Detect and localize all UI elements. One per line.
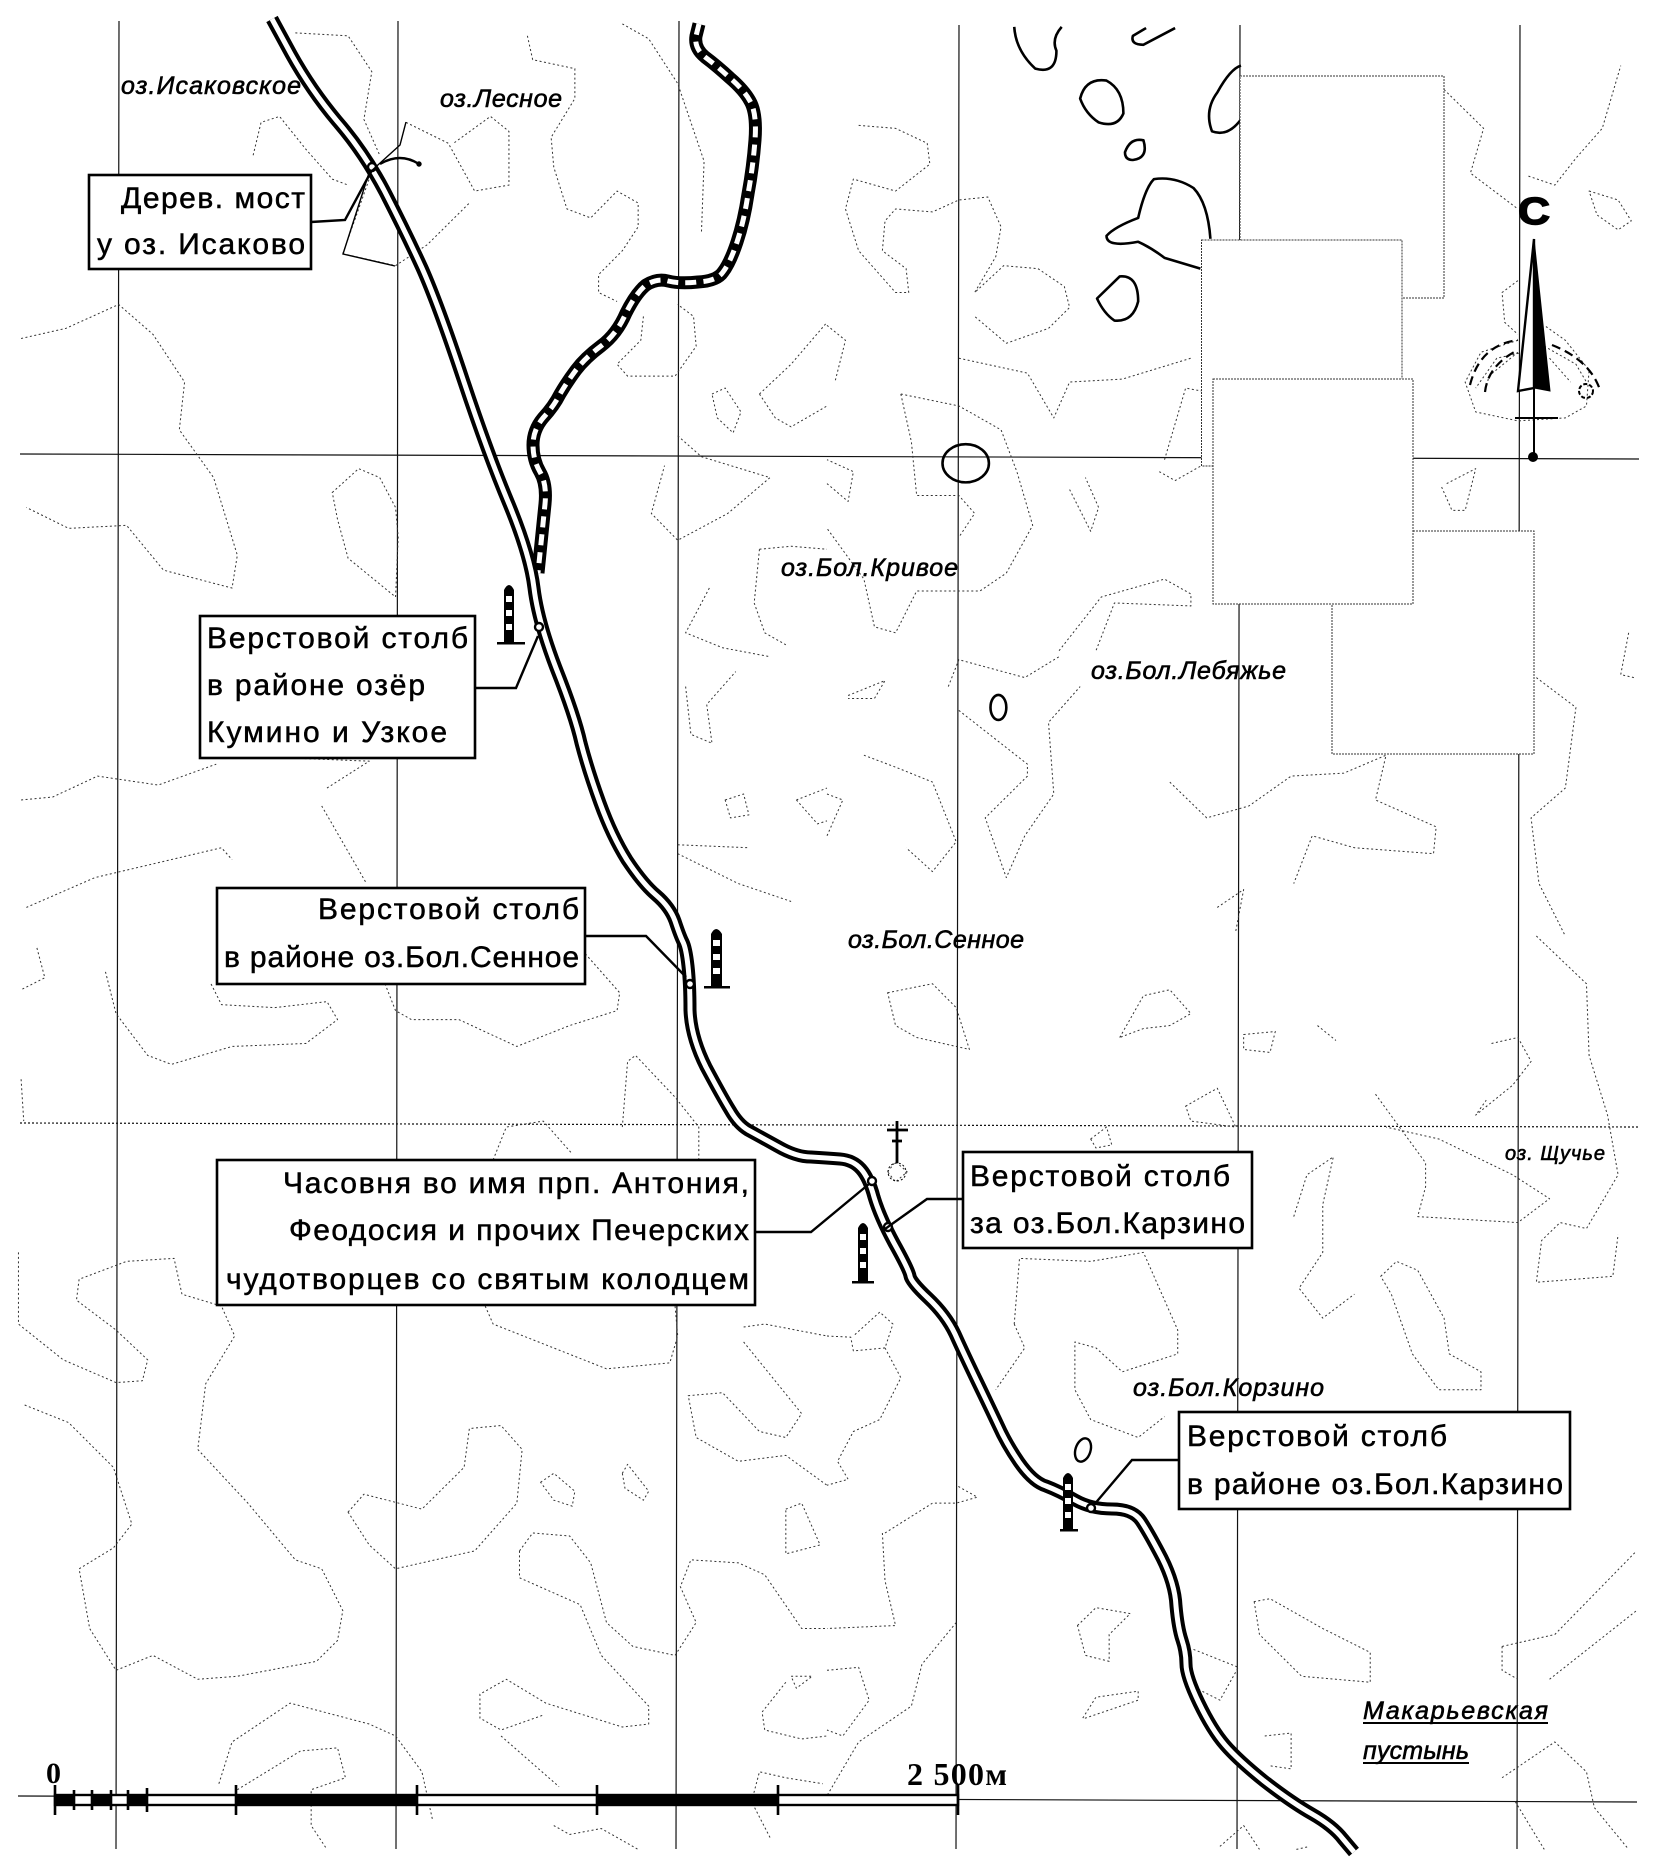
lake labels: оз.Лесное (440, 85, 562, 113)
callout: milepost Bol. Sennoe (217, 888, 686, 984)
callout: chapel: чудотворцев со святым колодцем (226, 1263, 749, 1296)
callout: chapel: Феодосия и прочих Печерских (289, 1214, 749, 1247)
lake labels: оз.Бол.Кривое (781, 554, 958, 582)
callout: milepost Kumino: в районе озёр (207, 669, 425, 702)
callout: milepost Bol. Sennoe: в районе оз.Бол.Сенное (224, 941, 579, 974)
callout: milepost Kumino (200, 616, 538, 758)
icon: milepost 4 (1060, 1473, 1078, 1532)
callout: milepost near Bol. Karzino: в районе оз.Бол.Карзино (1187, 1468, 1563, 1501)
lake labels: оз.Бол.Лебяжье (1091, 657, 1286, 685)
callout: wooden bridge: у оз. Исаково (97, 228, 305, 261)
icon: bridge mark (343, 122, 420, 266)
compass: С (1518, 191, 1550, 233)
blank patch rectangles (1202, 76, 1534, 754)
icon: chapel cross (887, 1121, 908, 1181)
callout: milepost near Bol. Karzino (1093, 1412, 1570, 1509)
lake labels: оз.Исаковское (121, 72, 301, 100)
callout: wooden bridge (89, 170, 372, 269)
road markers (368, 163, 1095, 1512)
icon: milepost 2 (704, 929, 730, 988)
lake labels: оз.Бол.Сенное (848, 926, 1024, 954)
callout: milepost near Bol. Karzino: Верстовой столб (1187, 1420, 1447, 1453)
place label: Makaryev hermitage: Макарьевская (1363, 1697, 1548, 1725)
callout: chapel (217, 1160, 869, 1305)
callout: milepost beyond Bol. Karzino (885, 1152, 1252, 1248)
callout: milepost Kumino: Кумино и Узкое (207, 716, 447, 749)
callout: milepost Kumino: Верстовой столб (207, 622, 468, 655)
callout: milepost beyond Bol. Karzino: за оз.Бол.Карзино (970, 1207, 1245, 1240)
scale bar (46, 1756, 1007, 1815)
callout: wooden bridge: Дерев. мост (121, 182, 305, 215)
place label: Makaryev hermitage: пустынь (1363, 1737, 1469, 1765)
road (272, 19, 1354, 1852)
lake labels: оз.Бол.Корзино (1133, 1374, 1324, 1402)
callout: chapel: Часовня во имя прп. Антония, (283, 1167, 749, 1200)
icon: milepost 3 (852, 1223, 874, 1284)
lake labels: оз. Щучье (1505, 1143, 1605, 1165)
callout: milepost Bol. Sennoe: Верстовой столб (318, 893, 579, 926)
lake labels (121, 72, 1605, 1402)
small lake O (1072, 1436, 1094, 1464)
scale bar: 2 500м (907, 1756, 1007, 1792)
compass (1470, 191, 1600, 462)
place label: Makaryev hermitage (1363, 1697, 1548, 1765)
scale bar: 0 (46, 1757, 61, 1790)
callout: milepost beyond Bol. Karzino: Верстовой столб (970, 1160, 1230, 1193)
lakes (943, 27, 1241, 720)
icon: milepost 1 (497, 585, 525, 644)
trail: dashed thick route (533, 24, 755, 573)
